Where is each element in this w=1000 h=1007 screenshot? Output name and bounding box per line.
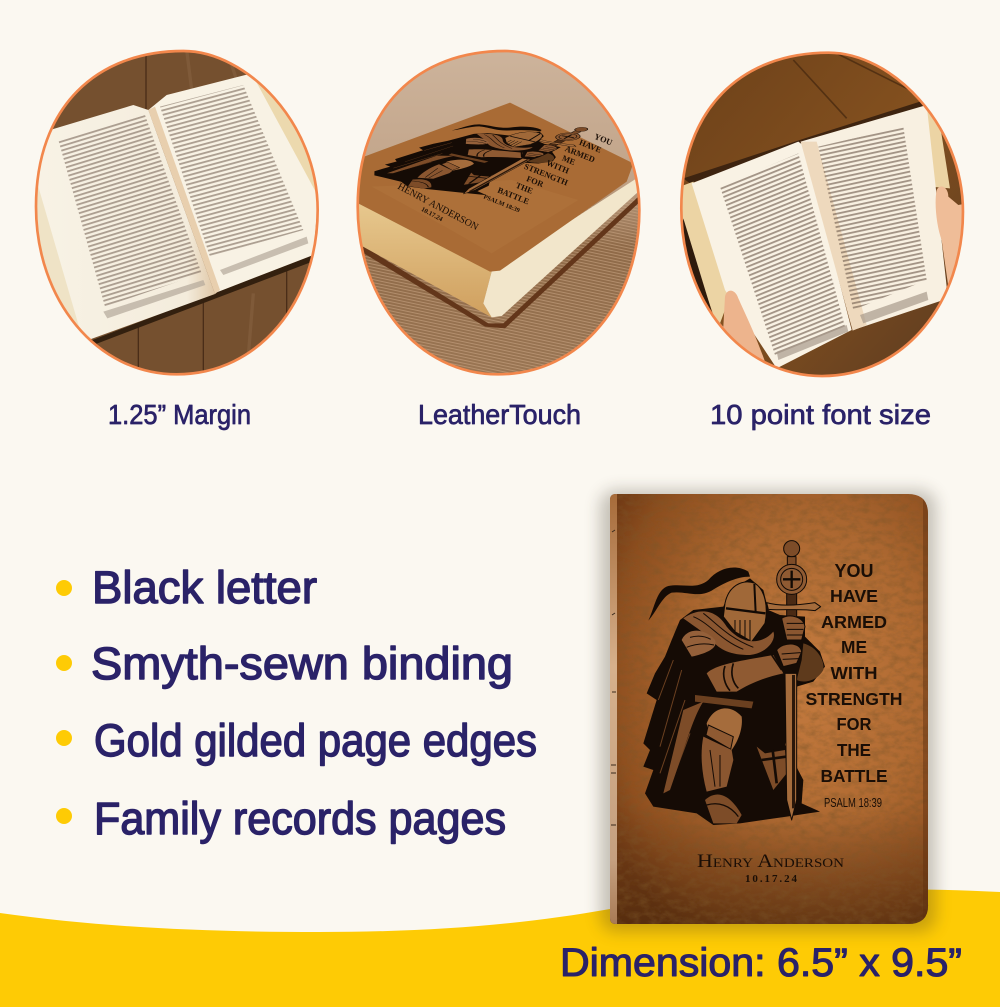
photo: open bible on dark wood — [27, 45, 328, 380]
yellow wave band — [0, 889, 1000, 1007]
cover date: 10.17.24 — [745, 873, 798, 885]
hand: lower left — [720, 290, 765, 361]
photo: engraved leather bible: FOR — [525, 174, 546, 190]
cover verse: HAVE — [830, 586, 878, 606]
photo border — [36, 51, 318, 374]
book: leather cover front — [600, 490, 936, 932]
photo: hands holding open bible — [675, 45, 970, 380]
bullet list: features: Black letter — [92, 562, 317, 613]
photo: engraved leather bible: HENRY ANDERSON — [396, 181, 480, 233]
cover verse: ARMED — [821, 612, 887, 632]
photo: engraved leather bible: PSALM 18:39 — [482, 193, 521, 214]
photo border — [681, 53, 963, 376]
photo: engraved leather bible: ME — [561, 154, 577, 167]
cover verse: THE — [837, 740, 871, 760]
cover verse: PSALM 18:39 — [824, 795, 882, 810]
photo: engraved leather bible: STRENGTH — [523, 162, 570, 188]
cover verse: ME — [841, 637, 867, 657]
cover name: Henry Anderson — [697, 851, 845, 872]
dimension label: Dimension: 6.5” x 9.5” — [560, 941, 962, 985]
caption: font size: 10 point font size — [710, 399, 931, 430]
hand: right — [936, 186, 962, 284]
photo: engraved leather bible: BATTLE — [496, 186, 531, 207]
cover verse: FOR — [836, 714, 872, 734]
photo: engraved leather bible: THE — [514, 181, 535, 196]
photo: engraved leather bible: ARMED — [564, 144, 596, 164]
bullet list: features: Smyth-sewn binding — [91, 638, 513, 689]
cover verse: WITH — [830, 663, 878, 683]
caption: margin: 1.25” Margin — [108, 399, 251, 430]
bullet list: features: Gold gilded page edges — [94, 715, 537, 766]
cover verse: YOU — [834, 561, 874, 581]
photo: engraved leather bible: YOU — [593, 132, 614, 147]
photo: engraved leather bible: WITH — [545, 158, 571, 176]
photo: engraved leather bible: 10.17.24 — [420, 206, 444, 224]
cover verse: BATTLE — [820, 766, 888, 786]
photo border — [358, 51, 639, 374]
engraving: kneeling knight with sword — [643, 541, 825, 825]
cover verse: STRENGTH — [806, 689, 902, 709]
caption: cover material: LeatherTouch — [418, 399, 581, 430]
bullet list: features — [56, 562, 537, 844]
photo: engraved leather bible — [345, 45, 645, 380]
photo: engraved leather bible: HAVE — [578, 138, 603, 155]
cover verse — [806, 561, 902, 810]
bullet list: features: Family records pages — [94, 793, 506, 844]
